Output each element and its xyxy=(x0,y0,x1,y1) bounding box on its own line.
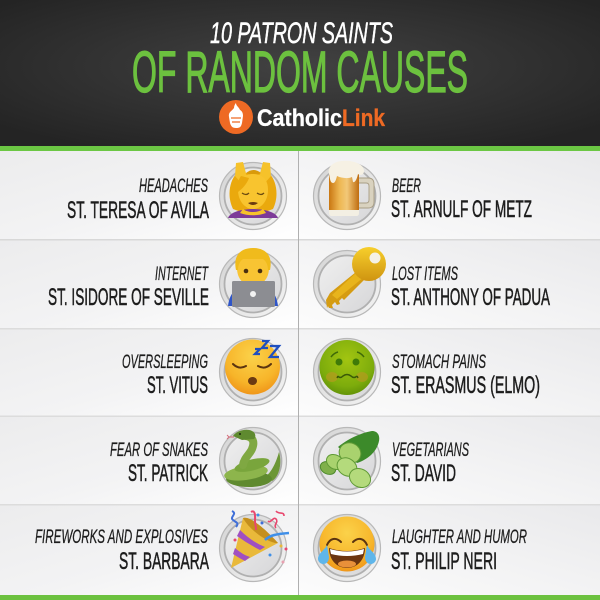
icon: man with laptop xyxy=(220,248,286,318)
panel: stomach pains xyxy=(391,351,540,399)
panel: lost items xyxy=(391,263,550,311)
title line: 10 patron saints: 10 PATRON SAINTS xyxy=(210,17,393,50)
panel: fear of snakes: FEAR OF SNAKES xyxy=(110,439,208,461)
icon: cucumber xyxy=(314,428,380,494)
panel: fear of snakes: ST. PATRICK xyxy=(128,460,208,487)
icon: woman with headache xyxy=(220,162,286,230)
logo: CatholicLink: Catholic xyxy=(257,105,342,132)
panel: headaches: HEADACHES xyxy=(139,175,208,197)
panel: vegetarians xyxy=(391,439,469,487)
panel: vegetarians: VEGETARIANS xyxy=(392,439,469,461)
icon: key xyxy=(314,247,386,318)
panel: laughter and humor xyxy=(391,526,527,575)
green footer bar xyxy=(0,595,600,600)
panel: fireworks and explosives xyxy=(35,526,209,575)
panel: fireworks and explosives: FIREWORKS AND EXPLOSIVES xyxy=(35,526,208,548)
green header bar xyxy=(0,146,600,152)
panel: beer: BEER xyxy=(392,175,421,197)
panel: lost items: LOST ITEMS xyxy=(392,263,458,285)
icon: snake xyxy=(220,428,286,494)
panel: oversleeping xyxy=(122,351,208,399)
panel: internet: INTERNET xyxy=(155,263,209,285)
panel: laughter and humor: ST. PHILIP NERI xyxy=(391,548,497,575)
icon: nauseated face xyxy=(314,338,380,406)
panel: stomach pains: STOMACH PAINS xyxy=(392,351,486,373)
panels background xyxy=(0,151,600,595)
panel: oversleeping: ST. VITUS xyxy=(147,372,208,399)
icon: sleeping face xyxy=(220,338,286,406)
panel: fireworks and explosives: ST. BARBARA xyxy=(119,548,209,575)
icon: laughing with tears xyxy=(314,514,380,582)
panel: oversleeping: OVERSLEEPING xyxy=(122,351,208,373)
panel: headaches: ST. TERESA OF AVILA xyxy=(67,197,209,224)
panel: internet xyxy=(48,263,209,311)
logo: CatholicLink: Link xyxy=(342,105,386,132)
header background xyxy=(0,0,600,147)
panel: beer xyxy=(391,175,532,223)
icon: party popper xyxy=(220,511,289,582)
panel: fear of snakes xyxy=(110,439,208,487)
icon: beer mug xyxy=(314,161,380,230)
panel: internet: ST. ISIDORE OF SEVILLE xyxy=(48,284,209,311)
panel: headaches xyxy=(67,175,209,224)
panel: vegetarians: ST. DAVID xyxy=(391,460,456,487)
logo: CatholicLink xyxy=(219,100,386,134)
